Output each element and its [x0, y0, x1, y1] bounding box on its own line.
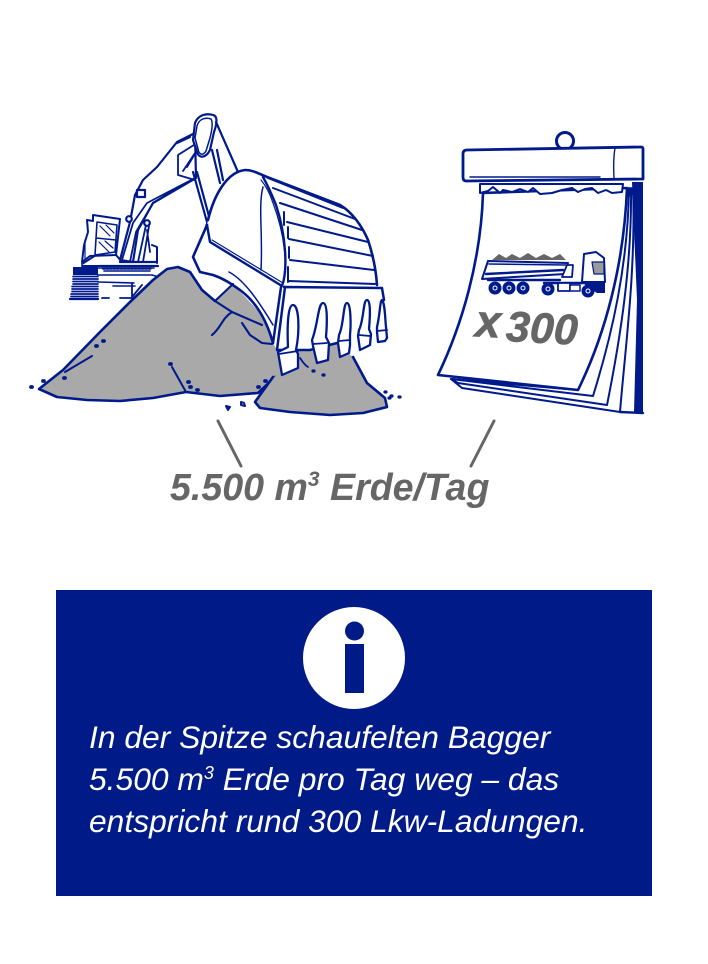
calendar spine: [632, 182, 643, 413]
boom: [120, 133, 197, 262]
base line of stack: [620, 412, 643, 413]
teeth: [278, 300, 387, 375]
illustration: excavator behind soil pile: [31, 114, 400, 415]
hanging ring: [556, 132, 574, 150]
front page: [438, 188, 627, 390]
illustration: tear-off calendar: [438, 132, 643, 413]
cabin: [82, 215, 158, 268]
multiplier label x300: 300: [505, 303, 579, 355]
info text: Erde pro Tag weg – das: [214, 761, 559, 797]
multiplier label x300: x: [471, 294, 505, 348]
arm: [193, 114, 238, 240]
info text: 3: [204, 763, 214, 783]
info icon: [303, 607, 405, 709]
soil pile right: [255, 343, 400, 415]
calendar header bar: [463, 147, 643, 181]
info text: entspricht rund 300 Lkw-Ladungen.: [89, 803, 588, 839]
info text: 5.500 m: [89, 761, 559, 797]
torn page edge: [480, 184, 623, 194]
caption: 5.500 m: [170, 466, 308, 508]
caption: 3: [308, 468, 320, 491]
stacked pages: [451, 188, 634, 412]
dump truck icon: [482, 252, 605, 298]
soil cracks over wedge: [212, 284, 272, 344]
info text: In der Spitze schaufelten Bagger: [89, 719, 552, 755]
leader line right: [471, 421, 494, 466]
bucket: [193, 170, 387, 375]
multiplier label x300: [471, 294, 579, 355]
crawler track: [70, 267, 166, 299]
caption: Erde/Tag: [320, 466, 489, 508]
leader line left: [218, 421, 241, 466]
soil pile left: [31, 267, 288, 410]
info panel: [56, 590, 652, 896]
